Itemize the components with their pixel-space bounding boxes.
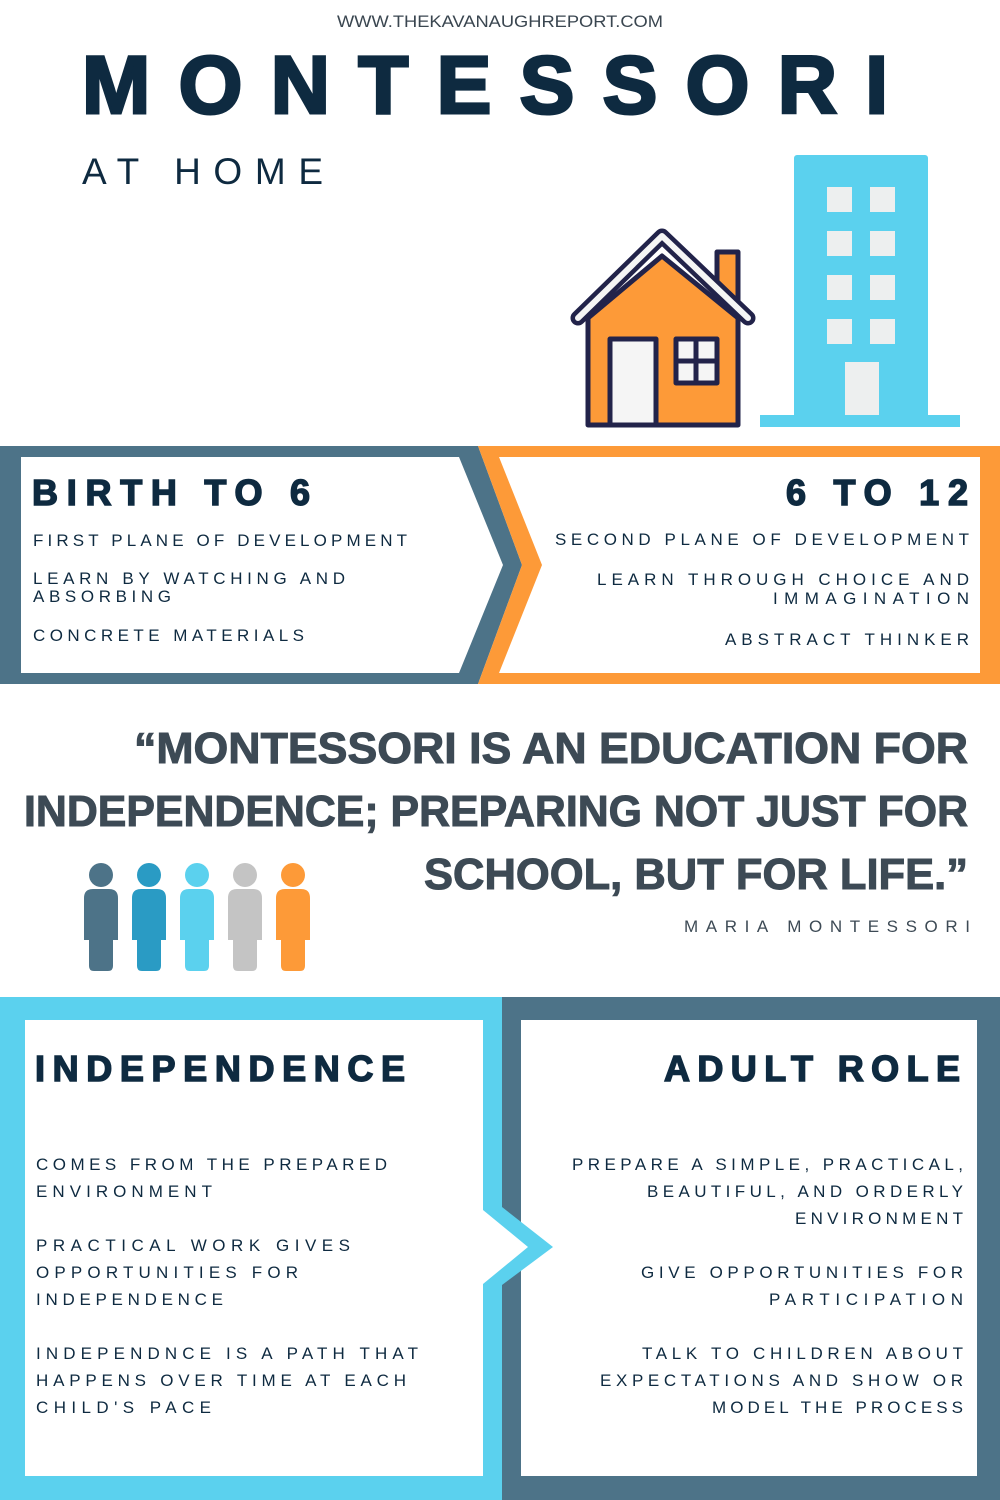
text: 6 to 12 items: ABSTRACT THINKER (725, 630, 969, 649)
text: independence items: OPPORTUNITIES FOR (36, 1263, 298, 1282)
text: independence items: CHILD'S PACE (36, 1398, 211, 1417)
text: independence items: HAPPENS OVER TIME AT EACH (36, 1371, 406, 1390)
text: adult role items: BEAUTIFUL, AND ORDERLY (647, 1182, 963, 1201)
text: adult role items: TALK TO CHILDREN ABOUT (642, 1344, 963, 1363)
heading: birth to 6: BIRTH TO 6 (32, 472, 310, 513)
panel: birth to 6 (0, 446, 522, 684)
website url: WWW.THEKAVANAUGHREPORT.COM (337, 12, 663, 31)
text: birth to 6 items: ABSORBING (33, 587, 171, 606)
panel: 6 to 12 (478, 446, 1000, 684)
quote: INDEPENDENCE; PREPARING NOT JUST FOR (24, 787, 968, 836)
text: independence items: INDEPENDNCE IS A PATH THAT (36, 1344, 418, 1363)
heading: 6 to 12: 6 TO 12 (786, 472, 968, 513)
text: adult role items: MODEL THE PROCESS (712, 1398, 963, 1417)
text: independence items (36, 1155, 418, 1417)
text: 6 to 12 items: SECOND PLANE OF DEVELOPMENT (555, 530, 969, 549)
quote: “MONTESSORI IS AN EDUCATION FOR (134, 724, 968, 773)
icon: people (84, 863, 310, 971)
subtitle: AT HOME (82, 151, 323, 192)
icon: building (760, 155, 960, 427)
quote: SCHOOL, BUT FOR LIFE.” (424, 850, 968, 899)
text: independence items: PRACTICAL WORK GIVES (36, 1236, 350, 1255)
icon: house (578, 236, 748, 425)
text: adult role items: PARTICIPATION (769, 1290, 963, 1309)
text: 6 to 12 items: IMMAGINATION (773, 589, 969, 608)
text: independence items: INDEPENDENCE (36, 1290, 223, 1309)
text: birth to 6 items: FIRST PLANE OF DEVELOPMENT (33, 531, 407, 550)
text: adult role items: EXPECTATIONS AND SHOW OR (600, 1371, 963, 1390)
text: 6 to 12 items: LEARN THROUGH CHOICE AND (597, 570, 969, 589)
heading: adult role: ADULT ROLE (664, 1048, 960, 1089)
text: independence items: ENVIRONMENT (36, 1182, 212, 1201)
text: adult role items (572, 1155, 963, 1417)
text: adult role items: ENVIRONMENT (795, 1209, 963, 1228)
quote author: MARIA MONTESSORI (684, 917, 970, 936)
text: 6 to 12 items (555, 530, 969, 649)
text: birth to 6 items: CONCRETE MATERIALS (33, 626, 304, 645)
text: birth to 6 items: LEARN BY WATCHING AND (33, 569, 345, 588)
panel: adult role (502, 997, 1000, 1500)
panel: independence (0, 997, 553, 1500)
text: adult role items: GIVE OPPORTUNITIES FOR (641, 1263, 963, 1282)
title: MONTESSORI (82, 40, 888, 131)
text: birth to 6 items (33, 531, 407, 645)
quote (24, 724, 968, 899)
text: adult role items: PREPARE A SIMPLE, PRACTICAL, (572, 1155, 963, 1174)
heading: independence: INDEPENDENCE (35, 1048, 405, 1089)
text: independence items: COMES FROM THE PREPARED (36, 1155, 387, 1174)
